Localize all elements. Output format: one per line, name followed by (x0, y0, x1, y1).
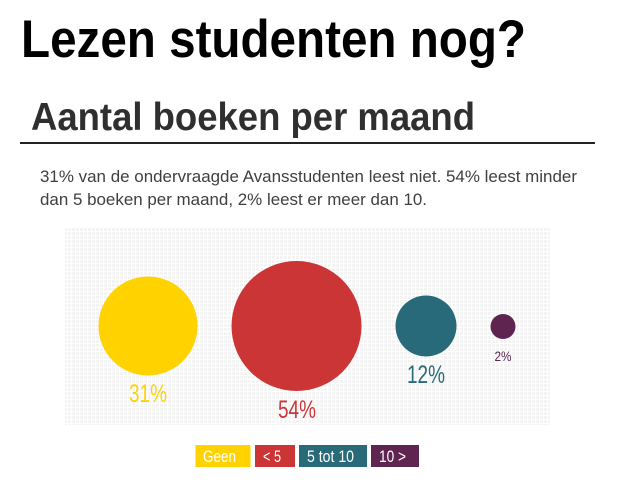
legend item: 5 tot 10: 5 tot 10 (307, 447, 354, 466)
legend item: minder dan 5: < 5 (263, 447, 281, 466)
section heading: Aantal boeken per maand (31, 96, 475, 139)
legend item: 10 of meer (371, 445, 419, 467)
legend item: 10 of meer: 10 > (379, 447, 406, 466)
bubble: 5 tot 10 12% (396, 296, 456, 389)
legend item: geen (196, 445, 250, 467)
bubble: 5 tot 10 12%: 12% (407, 361, 445, 389)
intro text (40, 168, 578, 209)
title: Lezen studenten nog? (21, 10, 526, 69)
bubble: 10 of meer 2%: 2% (494, 348, 512, 364)
intro text: 31% van de ondervraagde Avansstudenten leest niet. 54% leest minder (40, 168, 578, 186)
bubble: minder dan 5 54% (232, 261, 362, 424)
bubble: geen 31%: 31% (129, 380, 167, 408)
panel: bubble chart (65, 227, 550, 425)
dotted chart background (65, 227, 550, 425)
heading underline (20, 142, 595, 144)
legend item: minder dan 5 (255, 445, 295, 467)
intro text: dan 5 boeken per maand, 2% leest er meer dan 10. (40, 191, 427, 209)
legend (196, 445, 419, 467)
bubble: 10 of meer 2% (490, 314, 516, 364)
bubble: minder dan 5 54%: 54% (278, 396, 316, 424)
bubble: geen 31% (98, 276, 198, 408)
legend item: geen: Geen (203, 447, 236, 466)
